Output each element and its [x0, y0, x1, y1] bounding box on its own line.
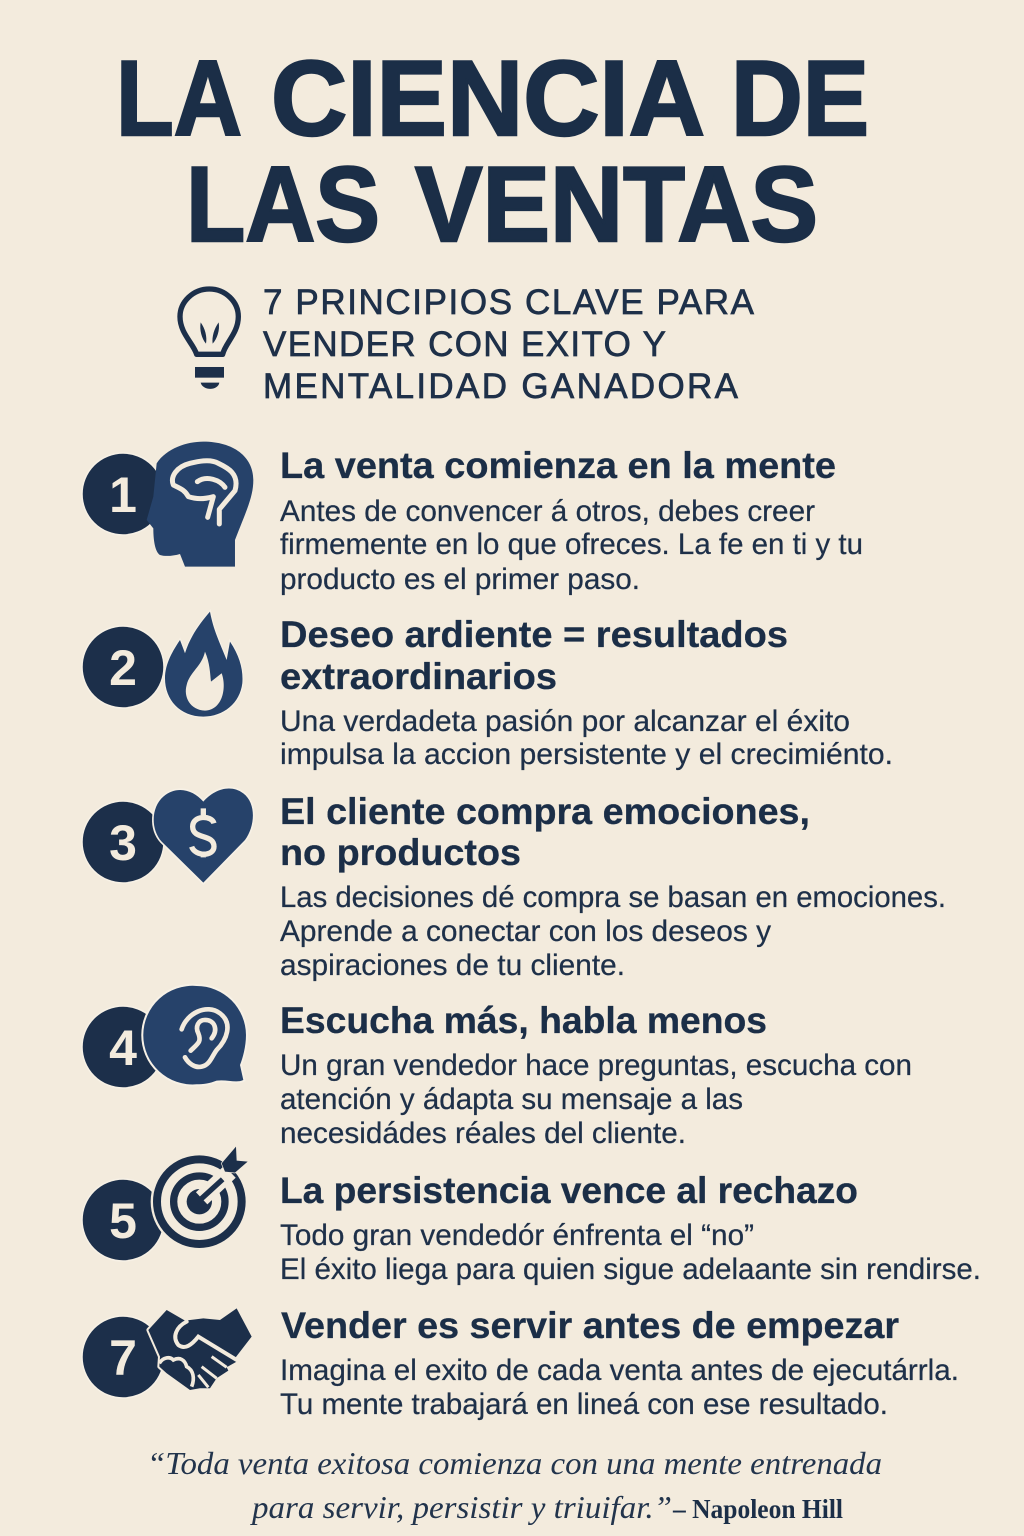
icon: ear in speech bubble [143, 986, 246, 1084]
number badge 3 [82, 801, 164, 883]
body 7: Imagina el exito de cada venta antes de ejecutárrla. [280, 1354, 959, 1387]
heading 2: extraordinarios [280, 656, 557, 697]
title: VENTAS [415, 144, 818, 264]
body 7 [280, 1354, 959, 1421]
icon: heart with dollar [154, 788, 253, 883]
body 4 [280, 1049, 912, 1150]
heading 5: La persistencia vence al rechazo [280, 1170, 858, 1211]
icon: handshake [148, 1308, 252, 1390]
icon: target with arrow [151, 1147, 248, 1250]
quote [147, 1445, 882, 1525]
principle 5 [82, 1147, 981, 1286]
body 7: Tu mente trabajará en lineá con ese resultado. [280, 1388, 888, 1421]
body 1: Antes de convencer á otros, debes creer [280, 495, 815, 528]
heading 1: La venta comienza en la mente [280, 445, 836, 486]
principle 2 [82, 612, 893, 771]
body 2: impulsa la accion persistente y el crecimiénto. [280, 738, 893, 771]
subtitle [263, 283, 755, 406]
heading 3: El cliente compra emociones, [280, 791, 810, 832]
title: LA [116, 38, 242, 158]
quote: para servir, persistir y triuifar.” [250, 1489, 672, 1525]
principle 1 [82, 442, 863, 596]
body 3: aspiraciones de tu cliente. [280, 949, 625, 982]
number badge 2 [82, 626, 164, 708]
body 1 [280, 495, 863, 596]
subtitle: 7 PRINCIPIOS CLAVE PARA [263, 283, 755, 322]
body 2 [280, 705, 893, 771]
heading 7: Vender es servir antes de empezar [281, 1305, 899, 1346]
body 1: firmemente en lo que ofreces. La fe en ti y tu [280, 528, 863, 561]
number badge 3: 3 [109, 815, 137, 871]
title: LAS [186, 144, 380, 264]
quote: “Toda venta exitosa comienza con una mente entrenada [147, 1445, 882, 1481]
body 5 [280, 1219, 981, 1286]
heading 2 [280, 614, 788, 697]
principle 4 [82, 986, 912, 1150]
principle 3 [82, 788, 946, 982]
body 3: Aprende a conectar con los deseos y [280, 915, 771, 948]
body 5: El éxito liega para quien sigue adelaante sin rendirse. [280, 1253, 981, 1286]
body 4: Un gran vendedor hace preguntas, escucha con [280, 1049, 912, 1082]
icon: flame [165, 612, 242, 717]
title: DE [731, 38, 869, 158]
number badge 4 [82, 1006, 164, 1088]
number badge 1 [82, 453, 164, 535]
body 4: necesidádes réales del cliente. [280, 1117, 686, 1150]
subtitle: MENTALIDAD GANADORA [263, 367, 739, 406]
body 4: atención y ádapta su mensaje a las [280, 1083, 743, 1116]
body 5: Todo gran vendedór énfrenta el “no” [280, 1219, 754, 1252]
heading 3 [280, 791, 810, 873]
heading 2: Deseo ardiente = resultados [280, 614, 788, 655]
principle 7 [82, 1305, 959, 1421]
number badge 4: 4 [109, 1020, 137, 1076]
title [116, 38, 869, 264]
subtitle: VENDER CON EXITO Y [263, 325, 666, 364]
body 3 [280, 881, 946, 982]
title: CIENCIA [271, 38, 705, 158]
number badge 2: 2 [109, 640, 137, 696]
body 2: Una verdadeta pasión por alcanzar el éxito [280, 705, 850, 738]
heading 3: no productos [280, 832, 521, 873]
heading 4: Escucha más, habla menos [280, 1000, 767, 1041]
body 3: Las decisiones dé compra se basan en emociones. [280, 881, 946, 914]
number badge 5 [82, 1179, 164, 1261]
quote: – Napoleon Hill [672, 1494, 843, 1524]
number badge 7: 7 [109, 1330, 137, 1386]
number badge 7 [82, 1316, 164, 1398]
number badge 5: 5 [109, 1193, 137, 1249]
number badge 1: 1 [109, 467, 137, 523]
icon: light bulb [180, 289, 238, 389]
icon: head with brain [147, 442, 253, 567]
body 1: producto es el primer paso. [280, 563, 640, 596]
